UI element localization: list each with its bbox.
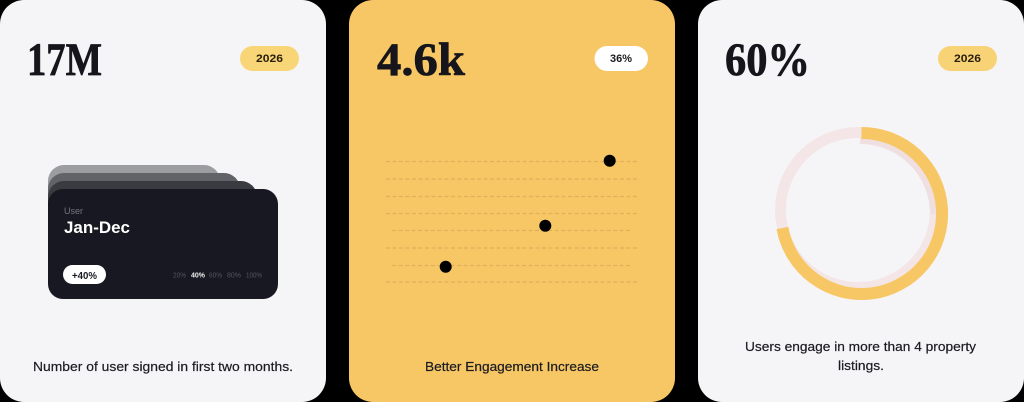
caption: listings: listings.	[838, 358, 884, 373]
headline: 17M: 17M	[27, 34, 102, 86]
label: Jan-Dec: Jan-Dec	[64, 219, 130, 237]
percentage scale	[173, 270, 262, 280]
badge: 2026: 2026	[256, 53, 283, 65]
badge: 2026	[938, 46, 997, 71]
label: User: User	[64, 206, 83, 217]
caption: users: Number of user signed in first two months.	[33, 359, 293, 374]
badge: 2026	[240, 46, 299, 71]
panel: engagement card	[349, 0, 675, 402]
pill: +40%: +40%	[72, 271, 97, 282]
headline: 4.6k: 4.6k	[377, 34, 466, 86]
badge: 2026: 2026	[954, 53, 981, 65]
percentage scale: 20%	[173, 270, 186, 280]
panel: users card	[0, 0, 326, 402]
percentage scale: 80%	[227, 270, 241, 280]
caption: engagement: Better Engagement Increase	[425, 359, 599, 374]
headline: 60%: 60%	[725, 34, 810, 86]
donut chart	[780, 132, 942, 294]
panel: listings card	[698, 0, 1024, 402]
percentage scale: 60%	[209, 270, 222, 280]
dot chart	[386, 155, 637, 282]
badge: 36%	[594, 46, 648, 71]
stacked dark cards	[48, 165, 278, 299]
caption: listings: Users engage in more than 4 property	[745, 339, 977, 354]
caption: listings	[745, 339, 977, 373]
percentage scale: 40%	[191, 270, 205, 280]
percentage scale: 100%	[246, 270, 262, 280]
pill: +40%	[63, 265, 106, 284]
badge: 36%: 36%	[610, 53, 632, 65]
